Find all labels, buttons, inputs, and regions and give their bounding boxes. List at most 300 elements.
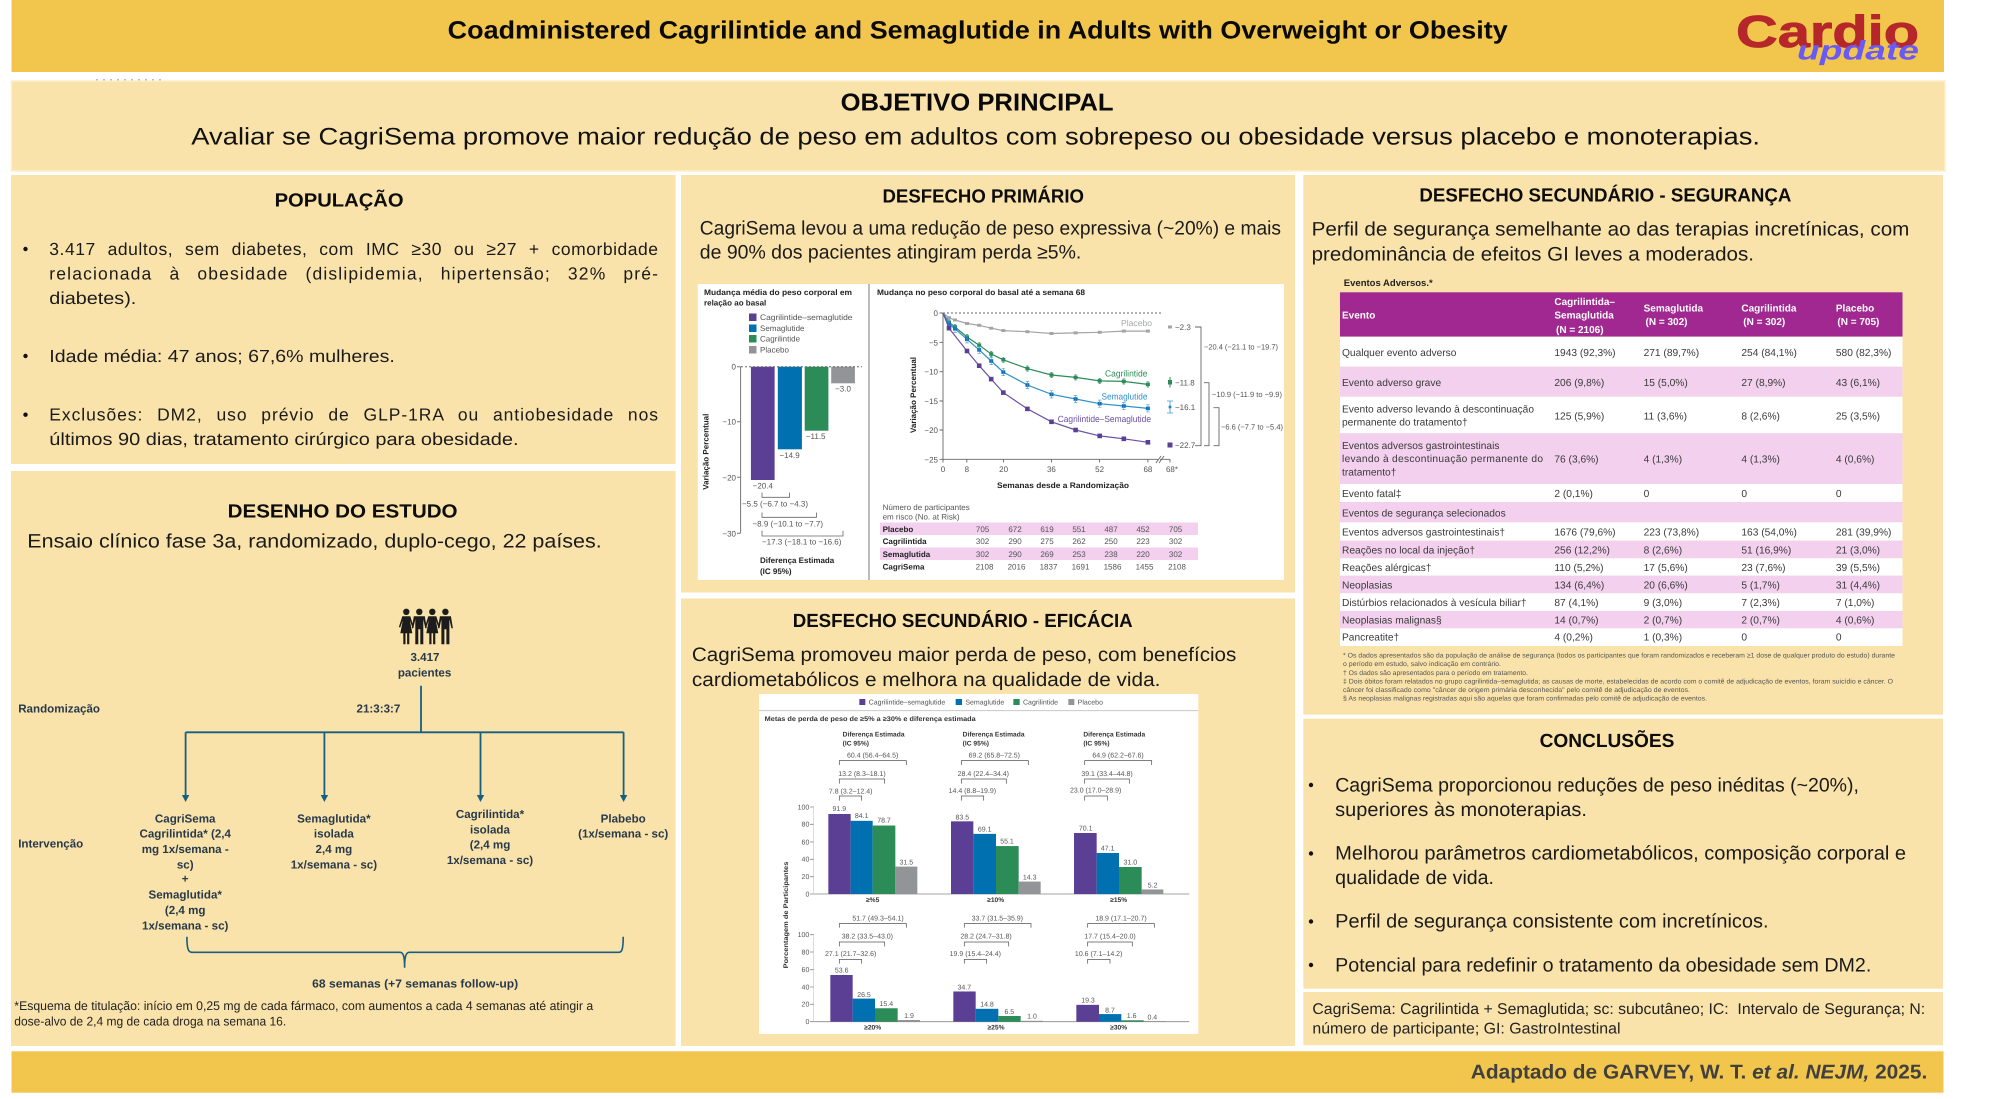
table: number at risk: 253 bbox=[1072, 550, 1086, 559]
line chart: weight change to week 68: Cagrilintide–Semaglutide bbox=[1058, 414, 1151, 424]
study description: Ensaio clínico fase 3a, randomizado, duplo-cego, 22 países. bbox=[27, 530, 602, 552]
table: adverse events: 23 (7,6%) bbox=[1741, 563, 1786, 574]
table: adverse events: Eventos adversos gastrointestinais† bbox=[1342, 528, 1505, 539]
bar chart: mean weight change: −11.5 bbox=[806, 432, 826, 441]
table: adverse events: Eventos Adversos.* bbox=[1344, 278, 1433, 289]
citation: Adaptado de GARVEY, W. T. et al. NEJM, 2025. bbox=[1471, 1062, 1927, 1084]
heading: segurança: DESFECHO SECUNDÁRIO - SEGURANÇA bbox=[1419, 185, 1792, 207]
table: adverse events: Cagrilintida– bbox=[1554, 297, 1615, 308]
table: number at risk: Semaglutida bbox=[883, 550, 931, 559]
chart title: Metas de perda de peso de ≥5% a ≥30% e diferença estimada bbox=[765, 715, 976, 723]
brackets and estimated differences: 10.6 (7.1–14.2) bbox=[1075, 950, 1122, 958]
bars: ≥20%: ≥20% bbox=[864, 1024, 881, 1031]
footer banner bbox=[12, 1051, 1944, 1093]
panel: objetivo principal bbox=[12, 81, 1945, 171]
table: adverse events: 31 (4,4%) bbox=[1836, 580, 1880, 591]
line chart: weight change to week 68: 68* bbox=[1166, 465, 1178, 474]
table: adverse events: 2 (0,7%) bbox=[1741, 616, 1780, 627]
bars: ≥25%: 34.7 bbox=[958, 983, 971, 991]
table footnotes: ‡ Dois óbitos foram relatados no grupo cagrilintida–semaglutida; as causas de morte, estabelecidas de acordo com o comitê de adjudicação de eventos, foram suicídio e câncer. O bbox=[1343, 678, 1893, 686]
bracket: duration bbox=[187, 937, 623, 968]
logo: Cardio update bbox=[1736, 6, 1919, 66]
line chart: weight change to week 68: 8 bbox=[965, 465, 970, 474]
heading: objetivo principal: OBJETIVO PRINCIPAL bbox=[841, 90, 1114, 117]
arm: CagriSema: Semaglutida* bbox=[148, 889, 222, 902]
table: number at risk bbox=[880, 503, 1198, 572]
table: adverse events: 254 (84,1%) bbox=[1741, 348, 1797, 359]
axes: 80 bbox=[802, 948, 809, 956]
bars: ≥10%: 69.1 bbox=[978, 826, 991, 833]
arm: cagrilintida: (2,4 mg bbox=[470, 839, 510, 852]
table: adverse events: 4 (0,2%) bbox=[1554, 633, 1593, 644]
bullet: parâmetros cardiometabólicos: qualidade de vida. bbox=[1335, 867, 1494, 889]
table: number at risk: 619 bbox=[1040, 525, 1054, 534]
bars: ≥10%: ≥10% bbox=[987, 896, 1004, 904]
table: number at risk: 551 bbox=[1072, 525, 1086, 534]
primary outcome text bbox=[700, 217, 1281, 264]
table: adverse events: Evento adverso levando à descontinuação bbox=[1342, 405, 1534, 416]
bullet: redução de peso bbox=[1309, 774, 1859, 821]
table: number at risk: Placebo bbox=[883, 525, 913, 534]
bars: ≥20%: 53.6 bbox=[835, 967, 848, 974]
footnote: titration: *Esquema de titulação: início em 0,25 mg de cada fármaco, com aumentos a cada 4 semanas até atingir a bbox=[14, 999, 593, 1013]
efficacy text: CagriSema promoveu maior perda de peso, com benefícios bbox=[692, 644, 1237, 666]
legend: Semaglutide bbox=[965, 698, 1004, 706]
bar chart: mean weight change: Semaglutide bbox=[760, 324, 805, 333]
brackets and estimated differences: 38.2 (33.5–43.0) bbox=[842, 933, 893, 940]
bars: ≥15% bbox=[1074, 825, 1163, 904]
bars: ≥5%: 78.7 bbox=[877, 816, 891, 824]
table: adverse events: Neoplasias malignas§ bbox=[1342, 616, 1442, 627]
table: adverse events: levando à descontinuação permanente do bbox=[1342, 454, 1543, 465]
table: adverse events: Evento bbox=[1342, 311, 1375, 322]
arm: placebo: (1x/semana - sc) bbox=[578, 828, 668, 841]
table: number at risk: Número de participantes bbox=[883, 503, 970, 512]
bullet: redução de peso: CagriSema proporcionou reduções de peso inéditas (~20%), bbox=[1335, 774, 1859, 796]
table: adverse events: Distúrbios relacionados à vesícula biliar† bbox=[1342, 598, 1527, 609]
table: number at risk: 2108 bbox=[976, 562, 994, 572]
bars: ≥15%: 5.2 bbox=[1148, 881, 1158, 889]
arm: cagrilintida: 1x/semana - sc) bbox=[447, 854, 533, 867]
table: adverse events: 9 (3,0%) bbox=[1644, 598, 1682, 609]
arm: CagriSema: sc) bbox=[177, 858, 194, 871]
bars: ≥10%: 83.5 bbox=[956, 813, 969, 821]
bullet: idade média: Idade média: 47 anos; 67,6% mulheres. bbox=[49, 346, 395, 366]
safety text: predominância de efeitos GI leves a moderados. bbox=[1312, 244, 1754, 266]
bars: ≥20%: 1.9 bbox=[904, 1012, 914, 1020]
panel: conclusões bbox=[1303, 719, 1943, 989]
table: adverse events: 163 (54,0%) bbox=[1741, 528, 1797, 539]
table: adverse events: Neoplasias bbox=[1342, 580, 1392, 591]
bars: ≥5% bbox=[828, 805, 917, 904]
header banner bbox=[12, 0, 1944, 72]
table: number at risk: 705 bbox=[976, 525, 990, 534]
line chart: weight change to week 68: Semaglutide bbox=[1102, 392, 1148, 402]
bars: ≥10% bbox=[951, 813, 1041, 904]
difference headers: (IC 95%) bbox=[843, 740, 869, 747]
table: number at risk: 250 bbox=[1104, 537, 1118, 546]
line chart: weight change to week 68: −22.7 bbox=[1175, 441, 1196, 450]
arm: CagriSema: (2,4 mg bbox=[165, 904, 205, 917]
bars: ≥15%: 47.1 bbox=[1101, 845, 1114, 852]
table: adverse events: 281 (39,9%) bbox=[1836, 528, 1891, 539]
line chart: weight change to week 68: −10.9 (−11.9 to −9.9) bbox=[1212, 390, 1282, 399]
arm: CagriSema: CagriSema bbox=[155, 812, 216, 825]
bars: ≥30%: 8.7 bbox=[1105, 1006, 1115, 1014]
brackets and estimated differences: 27.1 (21.7–32.6) bbox=[825, 950, 876, 958]
table: adverse events: 8 (2,6%) bbox=[1741, 411, 1780, 422]
line chart: weight change to week 68: 0 bbox=[941, 465, 946, 474]
bars: ≥5%: 84.1 bbox=[855, 812, 868, 820]
patient count: pacientes bbox=[398, 667, 451, 680]
table: number at risk: 672 bbox=[1008, 525, 1022, 534]
bars: ≥25%: 14.8 bbox=[980, 1001, 994, 1008]
arm: placebo bbox=[578, 812, 668, 841]
table: adverse events: 206 (9,8%) bbox=[1554, 378, 1604, 389]
table: adverse events: 51 (16,9%) bbox=[1741, 545, 1791, 556]
bullet: exclusões: últimos 90 dias, tratamento cirúrgico para obesidade. bbox=[49, 429, 519, 449]
heading: eficácia: DESFECHO SECUNDÁRIO - EFICÁCIA bbox=[793, 610, 1133, 632]
patient count: 3.417 bbox=[410, 651, 440, 664]
line chart: weight change to week 68: −15 bbox=[924, 397, 939, 406]
logo: Cardio update: update bbox=[1797, 36, 1919, 66]
table: adverse events: (N = 705) bbox=[1837, 317, 1879, 328]
table footnotes: * Os dados apresentados são da população de análise de segurança (todos os participantes que foram randomizados e receberam ≥1 dose de qualquer produto do estudo) durante bbox=[1343, 652, 1895, 660]
table: adverse events: Semaglutida bbox=[1644, 304, 1703, 314]
bar chart: mean weight change: −20 bbox=[722, 473, 737, 482]
table: adverse events: 4 (1,3%) bbox=[1644, 455, 1682, 466]
arm: cagrilintida bbox=[447, 808, 533, 867]
bars: ≥30%: 0.4 bbox=[1147, 1013, 1157, 1021]
line chart: weight change to week 68: Semanas desde a Randomização bbox=[997, 481, 1129, 490]
bar chart: mean weight change: Diferença Estimada bbox=[760, 556, 835, 565]
bullet: segurança: Perfil de segurança consistente com incretínicos. bbox=[1335, 911, 1768, 933]
table: adverse events: Pancreatite† bbox=[1342, 633, 1399, 644]
table: number at risk: 223 bbox=[1136, 537, 1150, 546]
title: Coadministered Cagrilintide and Semaglutide in Adults with Overweight or Obesity bbox=[448, 17, 1508, 45]
axes: 20 bbox=[802, 1001, 809, 1008]
line chart: weight change to week 68: Placebo bbox=[1121, 318, 1152, 328]
bars: ≥5%: 31.5 bbox=[900, 859, 913, 866]
bars: ≥20%: 26.5 bbox=[857, 991, 871, 999]
table: number at risk: 275 bbox=[1040, 537, 1054, 546]
line chart: weight change to week 68: −2.3 bbox=[1175, 323, 1191, 332]
bars: ≥10%: 14.3 bbox=[1023, 873, 1036, 881]
table: adverse events: 76 (3,6%) bbox=[1554, 455, 1599, 466]
arm: CagriSema: Cagrilintida* (2,4 bbox=[139, 828, 231, 841]
axes: 0 bbox=[805, 890, 809, 898]
bar chart: mean weight change: 0 bbox=[732, 363, 737, 372]
line chart: weight change to week 68: −10 bbox=[924, 368, 939, 377]
table: number at risk: 1837 bbox=[1040, 562, 1058, 572]
legend: Cagrilintide–semaglutide bbox=[869, 698, 945, 706]
table: number at risk: 302 bbox=[1169, 537, 1183, 546]
brackets and estimated differences: 18.9 (17.1–20.7) bbox=[1095, 915, 1147, 922]
panel: desenho do estudo bbox=[11, 471, 676, 1046]
bars: ≥25%: 6.5 bbox=[1004, 1008, 1014, 1016]
axes: 60 bbox=[802, 838, 809, 846]
table: adverse events: 7 (1,0%) bbox=[1836, 598, 1874, 609]
table: adverse events: 87 (4,1%) bbox=[1554, 598, 1599, 609]
table: number at risk: 238 bbox=[1104, 550, 1118, 559]
table: adverse events: Eventos adversos gastrointestinais bbox=[1342, 441, 1499, 452]
objective text: Avaliar se CagriSema promove maior redução de peso em adultos com sobrepeso ou obesidade versus placebo e monoterapias. bbox=[191, 123, 1760, 150]
table: adverse events: 43 (6,1%) bbox=[1836, 378, 1880, 389]
panel: abreviações: número de participante; GI: GastroIntestinal bbox=[1312, 1021, 1620, 1038]
table: adverse events: 1676 (79,6%) bbox=[1554, 528, 1616, 539]
table footnotes: § As neoplasias malignas registradas aqui são aquelas que foram confirmadas pelo comitê de adjudicação de eventos. bbox=[1343, 696, 1707, 702]
bars: ≥30%: 1.6 bbox=[1127, 1012, 1137, 1020]
efficacy text bbox=[692, 644, 1237, 691]
bullet: critérios de inclusão: 3.417 adultos, sem diabetes, com IMC ≥30 ou ≥27 + comorbidade bbox=[49, 239, 658, 259]
bars: ≥20%: 15.4 bbox=[880, 1000, 893, 1008]
bullet: parâmetros cardiometabólicos: Melhorou parâmetros cardiometabólicos, composição corporal e bbox=[1335, 843, 1906, 865]
arm: semaglutida: 1x/semana - sc) bbox=[291, 858, 377, 871]
table: number at risk: 302 bbox=[1169, 550, 1183, 559]
bars: ≥15%: 70.1 bbox=[1079, 825, 1092, 832]
difference headers: Diferença Estimada bbox=[843, 731, 905, 738]
line chart: weight change to week 68: Cagrilintide bbox=[1105, 369, 1148, 379]
bar chart: mean weight change: Cagrilintide–semaglutide bbox=[760, 313, 853, 322]
table: adverse events: 0 bbox=[1741, 633, 1747, 644]
bullet: exclusões: Exclusões: DM2, uso prévio de GLP-1RA ou antiobesidade nos bbox=[49, 405, 658, 425]
table: adverse events: 17 (5,6%) bbox=[1644, 563, 1688, 574]
heading: conclusões: CONCLUSÕES bbox=[1540, 730, 1674, 752]
table: number at risk: 290 bbox=[1008, 537, 1022, 546]
table: adverse events: 11 (3,6%) bbox=[1644, 411, 1687, 422]
table: number at risk: 452 bbox=[1136, 525, 1150, 534]
bar chart: mean weight change: (IC 95%) bbox=[760, 567, 792, 576]
table: adverse events: 7 (2,3%) bbox=[1741, 598, 1780, 609]
table: adverse events: 14 (0,7%) bbox=[1554, 616, 1599, 627]
table: number at risk: Cagrilintida bbox=[883, 537, 927, 546]
table: adverse events: 271 (89,7%) bbox=[1644, 348, 1699, 359]
table: adverse events: 256 (12,2%) bbox=[1554, 545, 1610, 556]
arm: CagriSema bbox=[139, 812, 231, 932]
axes: 40 bbox=[802, 856, 809, 863]
table: adverse events: 27 (8,9%) bbox=[1741, 378, 1786, 389]
table: adverse events: (N = 2106) bbox=[1556, 325, 1604, 336]
bars: ≥25%: 1.0 bbox=[1027, 1013, 1037, 1020]
footnote: titration: dose-alvo de 2,4 mg de cada droga na semana 16. bbox=[14, 1014, 286, 1028]
bar chart: mean weight change: −20.4 bbox=[753, 482, 773, 491]
table footnotes: † Os dados são apresentados para o período em tratamento. bbox=[1343, 670, 1528, 677]
label: randomização: Randomização bbox=[18, 703, 100, 716]
brackets and estimated differences: 13.2 (8.3–18.1) bbox=[838, 770, 886, 778]
bar chart: mean weight change: −8.9 (−10.1 to −7.7) bbox=[752, 519, 823, 528]
brackets and estimated differences: 23.0 (17.0–28.9) bbox=[1070, 787, 1121, 794]
bar chart: mean weight change: Mudança média do peso corporal em bbox=[704, 288, 852, 297]
table: adverse events: 4 (1,3%) bbox=[1741, 455, 1780, 466]
brackets and estimated differences: 33.7 (31.5–35.9) bbox=[972, 915, 1023, 922]
table: adverse events: Reações alérgicas† bbox=[1342, 563, 1431, 574]
chart image card bbox=[698, 284, 1284, 580]
table: adverse events: 580 (82,3%) bbox=[1836, 348, 1891, 359]
difference headers: (IC 95%) bbox=[963, 740, 989, 747]
table: number at risk: 2108 bbox=[1168, 562, 1186, 572]
duration label: 68 semanas (+7 semanas follow-up) bbox=[312, 977, 518, 990]
bullet: critérios de inclusão bbox=[23, 239, 658, 308]
panel: abreviações bbox=[1303, 992, 1943, 1045]
panel: abreviações: CagriSema: Cagrilintida + Semaglutida; sc: subcutâneo; IC: Intervalo de Segurança; N: bbox=[1312, 1001, 1925, 1018]
bullet: critérios de inclusão: relacionada à obesidade (dislipidemia, hipertensão; 32% pré- bbox=[49, 264, 658, 284]
brackets and estimated differences: 28.2 (24.7–31.8) bbox=[960, 933, 1012, 940]
table: adverse events: 25 (3,5%) bbox=[1836, 411, 1880, 422]
table: number at risk: 262 bbox=[1072, 537, 1086, 546]
table: adverse events: 20 (6,6%) bbox=[1644, 580, 1688, 591]
line chart: weight change to week 68: −20.4 (−21.1 to −19.7) bbox=[1204, 342, 1278, 352]
brackets and estimated differences: 14.4 (8.8–19.9) bbox=[949, 787, 996, 795]
line chart: weight change to week 68: −16.1 bbox=[1175, 403, 1196, 412]
bars: ≥10%: 55.1 bbox=[1000, 838, 1014, 845]
brackets and estimated differences: 28.4 (22.4–34.4) bbox=[958, 770, 1009, 778]
bars: ≥20% bbox=[830, 967, 920, 1031]
panel: desfecho primário bbox=[681, 175, 1295, 592]
table: number at risk: 2016 bbox=[1008, 562, 1026, 572]
footnote: titration bbox=[14, 999, 593, 1028]
table: adverse events: Evento fatal‡ bbox=[1342, 489, 1401, 500]
arm: cagrilintida: isolada bbox=[470, 823, 511, 836]
axes: 100 bbox=[798, 803, 809, 811]
line chart: weight change to week 68: −25 bbox=[924, 455, 939, 464]
table: number at risk: 290 bbox=[1008, 550, 1022, 559]
primary outcome text: de 90% dos pacientes atingiram perda ≥5%. bbox=[700, 242, 1081, 264]
line chart: weight change to week 68: −6.6 (−7.7 to −5.4) bbox=[1221, 422, 1283, 431]
table: adverse events: 2 (0,7%) bbox=[1644, 616, 1682, 627]
axes: 60 bbox=[802, 966, 809, 974]
table: adverse events: Cagrilintida bbox=[1741, 304, 1797, 314]
line chart: weight change to week 68: Variação Percentual bbox=[909, 357, 918, 433]
table footnotes: o período em estudo, salvo indicação em contrário. bbox=[1343, 661, 1501, 668]
bar chart: mean weight change: −14.9 bbox=[779, 451, 800, 460]
table: adverse events: Reações no local da injeção† bbox=[1342, 545, 1475, 556]
line chart: weight change to week 68: 20 bbox=[999, 465, 1009, 474]
table: adverse events: 134 (6,4%) bbox=[1554, 580, 1604, 591]
bullet: critérios de inclusão: diabetes). bbox=[49, 288, 136, 308]
bars: ≥30% bbox=[1076, 997, 1166, 1031]
table: number at risk: em risco (No. at Risk) bbox=[883, 512, 960, 521]
table: number at risk: 1586 bbox=[1104, 562, 1122, 572]
bar charts: weight loss targets bbox=[759, 694, 1198, 1034]
table footnotes bbox=[1343, 652, 1895, 702]
arm: semaglutida: Semaglutida* bbox=[297, 812, 371, 825]
table: adverse events: Placebo bbox=[1836, 304, 1874, 314]
arm: cagrilintida: Cagrilintida* bbox=[456, 808, 525, 821]
bar chart: mean weight change: −17.3 (−18.1 to −16.6) bbox=[762, 538, 842, 547]
heading: população: POPULAÇÃO bbox=[275, 190, 404, 212]
primary outcome text: CagriSema levou a uma redução de peso expressiva (~20%) e mais bbox=[700, 217, 1281, 239]
bar chart: mean weight change: Variação Percentual bbox=[702, 414, 710, 490]
line chart: weight change to week 68: 36 bbox=[1047, 465, 1056, 474]
table: adverse events: Evento adverso grave bbox=[1342, 378, 1441, 389]
bars: ≥5%: ≥%5 bbox=[866, 896, 879, 904]
table: adverse events: 4 (0,6%) bbox=[1836, 455, 1874, 466]
table: number at risk: 487 bbox=[1104, 525, 1118, 534]
patient count bbox=[398, 651, 451, 680]
safety text bbox=[1312, 219, 1909, 266]
bars: ≥15%: ≥15% bbox=[1110, 896, 1127, 904]
bars: ≥25% bbox=[953, 983, 1043, 1031]
table: number at risk: 302 bbox=[976, 537, 990, 546]
axes: Porcentagem de Participantes bbox=[782, 862, 790, 968]
bar chart: mean weight change: −5.5 (−6.7 to −4.3) bbox=[742, 499, 808, 508]
line chart: weight change to week 68: Mudança no peso corporal do basal até a semana 68 bbox=[877, 288, 1086, 297]
table: adverse events: 21 (3,0%) bbox=[1836, 545, 1880, 556]
table: adverse events: 0 bbox=[1836, 633, 1842, 644]
table: adverse events: 5 (1,7%) bbox=[1741, 580, 1780, 591]
brackets and estimated differences bbox=[825, 752, 1154, 964]
label: intervenção: Intervenção bbox=[18, 838, 83, 851]
table: number at risk: 302 bbox=[976, 550, 990, 559]
bullet: exclusões bbox=[23, 405, 658, 449]
bullet: redução de peso: superiores às monoterapias. bbox=[1335, 799, 1587, 821]
arm: semaglutida: isolada bbox=[314, 828, 354, 841]
brackets and estimated differences: 51.7 (49.3–54.1) bbox=[852, 915, 904, 922]
legend bbox=[859, 698, 1103, 706]
table: adverse events: 0 bbox=[1836, 489, 1842, 500]
table: adverse events: Qualquer evento adverso bbox=[1342, 348, 1457, 359]
difference headers: (IC 95%) bbox=[1083, 740, 1110, 747]
line chart: weight change to week 68 bbox=[877, 288, 1283, 490]
table: adverse events: 110 (5,2%) bbox=[1554, 563, 1603, 574]
brackets and estimated differences: 39.1 (33.4–44.8) bbox=[1081, 770, 1133, 778]
bar chart: mean weight change bbox=[702, 288, 862, 576]
table footnotes: câncer foi classificado como "câncer de origem primária desconhecida" pelo comitê de adjudicação de eventos. bbox=[1343, 687, 1690, 694]
legend: Placebo bbox=[1078, 698, 1103, 706]
table: adverse events: 1 (0,3%) bbox=[1644, 633, 1682, 644]
table: adverse events: 0 bbox=[1741, 489, 1747, 500]
line chart: weight change to week 68: 52 bbox=[1095, 465, 1105, 474]
arm: semaglutida bbox=[291, 812, 377, 871]
bar chart: mean weight change: Cagrilintide bbox=[760, 334, 801, 344]
table: adverse events: tratamento† bbox=[1342, 468, 1396, 479]
table: adverse events: 0 bbox=[1644, 489, 1650, 500]
difference headers: Diferença Estimada bbox=[1083, 731, 1146, 738]
brackets and estimated differences: 19.9 (15.4–24.4) bbox=[950, 950, 1001, 958]
panel: desfecho secundário segurança bbox=[1303, 175, 1943, 715]
line chart: weight change to week 68: 68 bbox=[1143, 465, 1153, 474]
axes: 0 bbox=[805, 1018, 809, 1026]
table: number at risk: 220 bbox=[1136, 550, 1150, 559]
panel: população bbox=[11, 175, 676, 464]
bar chart: mean weight change: Placebo bbox=[760, 346, 789, 354]
table: adverse events: Eventos de segurança selecionados bbox=[1342, 508, 1506, 519]
table: adverse events: (N = 302) bbox=[1743, 317, 1785, 328]
table: adverse events: 223 (73,8%) bbox=[1644, 528, 1699, 539]
brackets and estimated differences: 69.2 (65.8–72.5) bbox=[969, 752, 1020, 759]
table: adverse events: 2 (0,1%) bbox=[1554, 489, 1593, 500]
efficacy text: cardiometabólicos e melhora na qualidade de vida. bbox=[692, 669, 1160, 691]
table: adverse events: 4 (0,6%) bbox=[1836, 616, 1874, 627]
axes: 20 bbox=[802, 873, 809, 881]
bullet: parâmetros cardiometabólicos bbox=[1309, 843, 1906, 889]
bar chart: mean weight change: relação ao basal bbox=[704, 298, 766, 308]
difference headers bbox=[843, 731, 1146, 747]
bar chart: mean weight change: −30 bbox=[722, 529, 737, 538]
bars: ≥25%: ≥25% bbox=[987, 1024, 1005, 1031]
table: adverse events: 15 (5,0%) bbox=[1644, 378, 1688, 389]
table: number at risk: 1455 bbox=[1136, 562, 1154, 572]
table: adverse events: permanente do tratamento† bbox=[1342, 417, 1468, 428]
ratio: 21:3:3:7 bbox=[356, 703, 400, 716]
brackets and estimated differences: 17.7 (15.4–20.0) bbox=[1084, 933, 1136, 940]
arm: CagriSema: + bbox=[182, 873, 189, 886]
table: adverse events: Semaglutida bbox=[1554, 310, 1614, 322]
bars: ≥15%: 31.0 bbox=[1124, 859, 1137, 866]
brackets and estimated differences: 64.9 (62.2–67.6) bbox=[1092, 752, 1144, 759]
table: number at risk: CagriSema bbox=[883, 562, 925, 572]
bars: ≥30%: ≥30% bbox=[1110, 1024, 1127, 1031]
